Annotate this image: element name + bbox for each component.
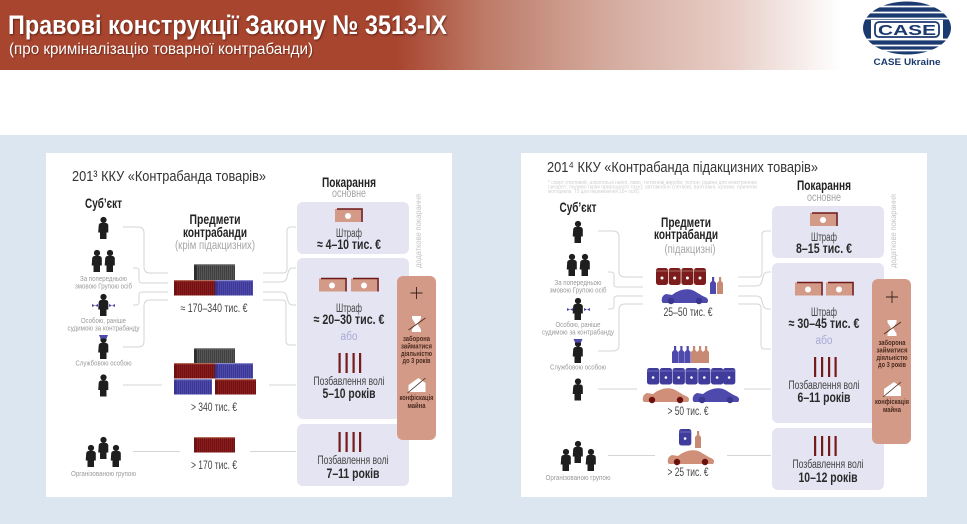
- penalty card: fine 4–10: Штраф: [336, 228, 362, 240]
- heading: punishment: Покарання: [322, 175, 376, 190]
- penalty card: prison 10–12: Позбавлення волі: [792, 459, 864, 471]
- icon: organised group, caption: Організованою групою: [546, 473, 611, 482]
- icon: organised group, caption: [71, 437, 136, 478]
- heading: items: (крім підакцизних): [175, 240, 255, 252]
- icon: one container: [194, 437, 235, 452]
- heading: punishment: основне: [332, 188, 366, 200]
- vertical label: additional punishment: додаткове покарання: [888, 194, 898, 268]
- additional punishment card: конфіскація: [400, 393, 434, 402]
- penalty card: fine 20–30 or prison 5–10: ≈ 20–30 тис. €: [314, 311, 385, 327]
- heading: items: контрабанди: [654, 227, 718, 242]
- heading: punishment: [322, 175, 376, 200]
- heading: items: (підакцизні): [664, 244, 716, 256]
- penalty card: prison 7–11: 7–11 років: [326, 465, 380, 481]
- icon: barrels, bottles and blue car: [656, 268, 723, 304]
- panel title: 201⁴ ККУ «Контрабанда підакцизних товарів»: [547, 159, 818, 176]
- icon: two persons, caption: За попередньою: [554, 278, 602, 287]
- icon: person, large amount: [98, 374, 108, 396]
- footnote: мотоцикли, ТЗ для перевезення 10+ осіб).: [548, 189, 640, 195]
- icon: person with prior conviction, caption: судимою за контрабанду: [68, 324, 140, 332]
- additional punishment card: заборона: [878, 338, 906, 347]
- icon: official, caption: [76, 335, 132, 368]
- heading: punishment: [797, 178, 851, 204]
- icon: barrel, bottle, car: [668, 429, 714, 465]
- icon: bottles, seven barrels, two cars: [643, 346, 739, 403]
- penalty card: fine 8–15: [772, 206, 884, 258]
- icon: person, large amount: [573, 378, 583, 400]
- penalty card: fine 30–45 or prison 6–11: Штраф: [811, 307, 837, 319]
- icon: person: [98, 217, 108, 239]
- icon: official, caption: [550, 339, 606, 372]
- icon: organised group, caption: [546, 441, 611, 482]
- logo: CASE Ukraine: [860, 2, 954, 67]
- icon: organised group, caption: Організованою групою: [71, 469, 136, 478]
- heading: items: контрабанди: [183, 225, 247, 240]
- icon: person with prior conviction, caption: Особою, раніше: [556, 320, 600, 329]
- value: > 25 тис. €: [668, 467, 709, 479]
- additional punishment card: до 3 років: [878, 360, 906, 369]
- additional punishment card: діяльністю: [876, 353, 908, 362]
- icon: five containers: [174, 348, 256, 394]
- additional punishment card: конфіскація: [875, 397, 909, 406]
- value: ≈ 170–340 тис. €: [180, 303, 248, 315]
- heading: subject: Суб’єкт: [560, 200, 597, 215]
- panel: стаття 201³ контрабанда товарів: [46, 153, 452, 497]
- additional punishment card: заборона: [403, 334, 431, 343]
- icon: two persons, caption: За попередньою: [80, 274, 127, 283]
- penalty card: prison 7–11: [297, 424, 409, 486]
- heading: items: [654, 215, 718, 256]
- penalty card: fine 20–30 or prison 5–10: 5–10 років: [322, 385, 376, 401]
- additional punishment card: до 3 років: [402, 356, 431, 365]
- icon: two persons, caption: змовою Групою осіб: [75, 282, 132, 290]
- penalty card: fine 4–10: ≈ 4–10 тис. €: [317, 236, 381, 252]
- icon: person with prior conviction, caption: [68, 294, 140, 332]
- footnote: * спирт етиловий, алкогольні напої, пиво, тютюнові вироби, тютюн; рідини для електронних: [548, 179, 757, 186]
- heading: items: Предмети: [190, 212, 240, 227]
- icon: person with prior conviction, caption: [542, 298, 614, 336]
- heading: subject: Суб’єкт: [85, 196, 122, 211]
- icon: two persons, caption: [550, 254, 606, 294]
- additional punishment card: майна: [408, 401, 426, 410]
- heading: punishment: Покарання: [797, 178, 851, 193]
- icon: two persons, caption: змовою Групою осіб: [550, 286, 606, 294]
- penalty card: fine 8–15: 8–15 тис. €: [796, 240, 852, 256]
- logo: CASE Ukraine: CASE: [878, 22, 936, 39]
- penalty card: fine 30–45 or prison 6–11: ≈ 30–45 тис. €: [788, 315, 860, 331]
- value: > 170 тис. €: [191, 460, 237, 472]
- icon: person with prior conviction, caption: судимою за контрабанду: [542, 328, 614, 336]
- penalty card: fine 30–45 or prison 6–11: або: [816, 335, 832, 347]
- value: > 50 тис. €: [668, 406, 709, 418]
- icon: two persons, caption: [75, 250, 132, 290]
- panel: стаття 201⁴ контрабанда підакцизних товарів: [521, 153, 927, 497]
- logo: CASE Ukraine: CASE Ukraine: [874, 57, 940, 67]
- penalty card: fine 20–30 or prison 5–10: [297, 258, 409, 419]
- vertical label: additional punishment: додаткове покарання: [413, 194, 423, 268]
- connector lines: [598, 231, 771, 456]
- penalty card: fine 30–45 or prison 6–11: [772, 263, 884, 423]
- penalty card: fine 8–15: Штраф: [811, 232, 837, 244]
- icon: person: [573, 221, 583, 243]
- header banner: [0, 0, 967, 70]
- additional punishment card: майна: [883, 405, 902, 414]
- heading: punishment: основне: [807, 192, 841, 204]
- icon: official, caption: Службовою особою: [550, 362, 606, 372]
- subtitle: (про криміналізацію товарної контрабанди): [9, 41, 313, 58]
- footnote: сигарет; паливо (крім природного газу); автомобілі (легкові, вантажні, кузови, причепи: [548, 184, 757, 190]
- additional punishment card: займатися: [876, 346, 908, 354]
- penalty card: fine 20–30 or prison 5–10: Штраф: [336, 303, 362, 315]
- panel title: 201³ ККУ «Контрабанда товарів»: [72, 168, 266, 185]
- penalty card: fine 20–30 or prison 5–10: Позбавлення волі: [314, 376, 384, 388]
- penalty card: fine 30–45 or prison 6–11: Позбавлення волі: [788, 380, 860, 392]
- additional punishment card: діяльністю: [401, 349, 432, 358]
- penalty card: fine 4–10: [297, 202, 409, 254]
- penalty card: prison 7–11: Позбавлення волі: [318, 455, 388, 467]
- value: 25–50 тис. €: [664, 307, 713, 319]
- icon: person with prior conviction, caption: Особою, раніше: [81, 316, 126, 325]
- icon: official, caption: Службовою особою: [76, 358, 132, 368]
- title: Правові конструкції Закону № 3513-ІХ: [8, 10, 447, 40]
- additional punishment card: [397, 276, 436, 440]
- penalty card: fine 30–45 or prison 6–11: 6–11 років: [798, 389, 851, 405]
- footnote: [548, 179, 757, 195]
- heading: items: Предмети: [661, 215, 711, 230]
- value: > 340 тис. €: [191, 402, 237, 414]
- additional punishment card: займатися: [401, 342, 432, 350]
- heading: items: [175, 212, 255, 252]
- additional punishment card: [872, 279, 911, 444]
- icon: three containers: [174, 264, 253, 296]
- penalty card: prison 10–12: [772, 428, 884, 490]
- penalty card: prison 10–12: 10–12 років: [798, 469, 858, 485]
- connector lines: [123, 227, 296, 452]
- page background: [0, 135, 967, 524]
- penalty card: fine 20–30 or prison 5–10: або: [340, 331, 358, 343]
